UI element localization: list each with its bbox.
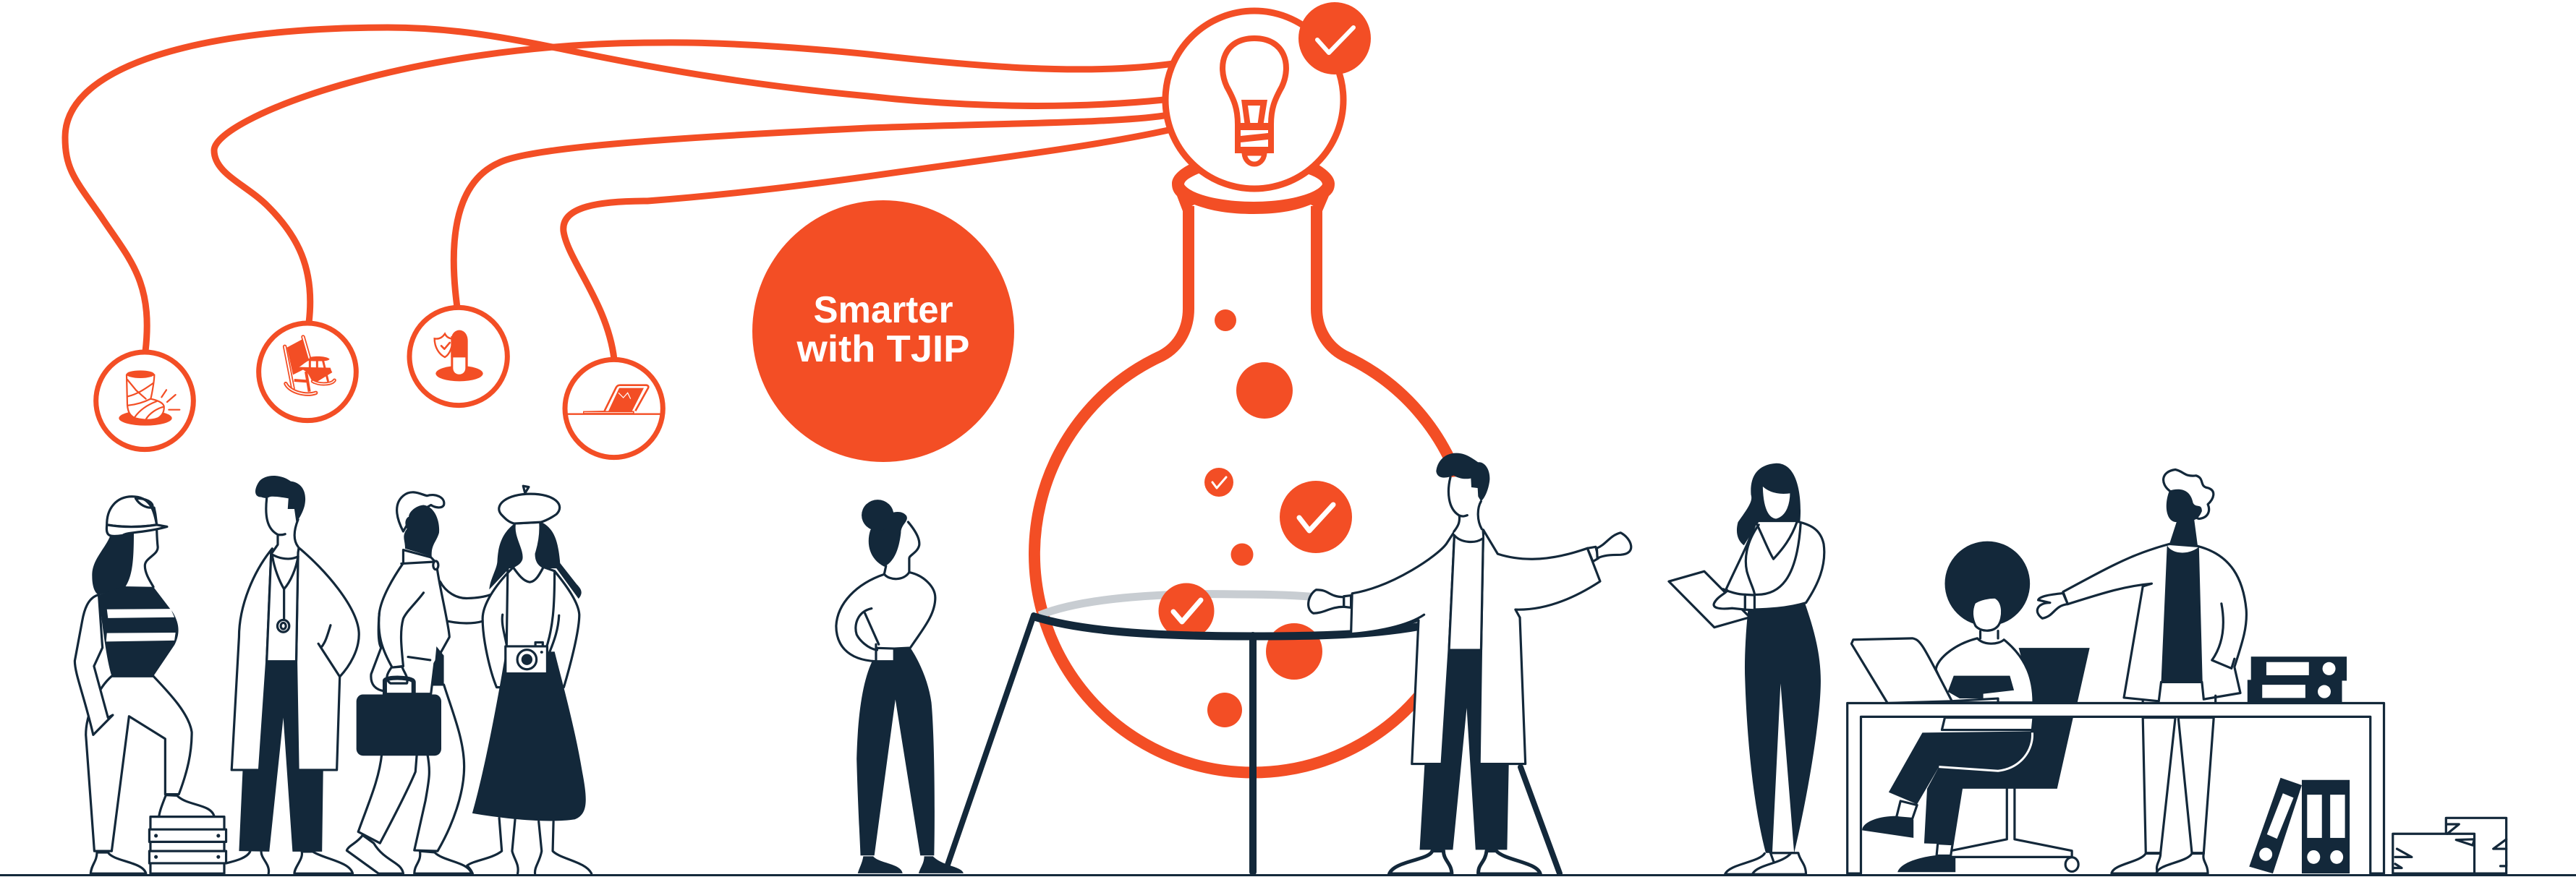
figure: man with briefcase xyxy=(347,492,490,873)
lightbulb xyxy=(1223,38,1286,164)
desk and seated person with colleague xyxy=(1848,469,2507,873)
standing colleague upper body xyxy=(2037,469,2246,703)
circle icon: rocking chair xyxy=(259,323,356,421)
figure: woman with tablet xyxy=(1669,463,1824,874)
connector curves to lightbulb xyxy=(65,27,1173,359)
figure: woman with hard hat xyxy=(75,497,226,873)
figure: woman with beret and camera xyxy=(467,486,592,873)
ground line xyxy=(0,874,2576,876)
colleague legs and shoes xyxy=(2112,718,2214,873)
office chair base xyxy=(1951,782,2078,871)
stacked boxes xyxy=(149,817,226,873)
bubble with tick large xyxy=(1280,481,1352,553)
paper stacks xyxy=(2393,818,2507,873)
office chair back xyxy=(2019,648,2090,703)
lightbulb circle xyxy=(1165,2,1371,189)
bubbles xyxy=(1159,309,1352,727)
tripod back ring xyxy=(1040,594,1318,615)
floor binders xyxy=(2249,778,2350,873)
desktop binders xyxy=(2248,656,2347,703)
tripod legs and front ring xyxy=(948,615,1560,873)
flask rim xyxy=(1172,145,1335,214)
badge: Smarter with TJIP xyxy=(752,200,1014,462)
badge: Smarter with TJIP: Smarter xyxy=(813,289,953,331)
figure: doctor with stethoscope xyxy=(226,476,359,873)
seated person upper body xyxy=(1851,542,2033,703)
desk xyxy=(1848,703,2384,873)
circle icon: shield and pill xyxy=(409,307,507,406)
seated person legs xyxy=(1862,718,2073,872)
circle icon: leg in cast xyxy=(96,352,193,450)
badge: Smarter with TJIP: with TJIP xyxy=(796,328,969,370)
tick badge xyxy=(1298,2,1371,74)
bubble with tick at ring xyxy=(1159,583,1214,639)
flask body xyxy=(1034,206,1471,772)
scientist head and collar xyxy=(1436,453,1489,542)
circle icon: laptop on table xyxy=(565,359,663,458)
figure: scientist in lab coat xyxy=(1309,530,1631,874)
figure: woman beside flask xyxy=(836,500,964,873)
flask xyxy=(1034,145,1471,772)
bubble with tick small xyxy=(1204,468,1233,497)
camera xyxy=(506,642,547,674)
